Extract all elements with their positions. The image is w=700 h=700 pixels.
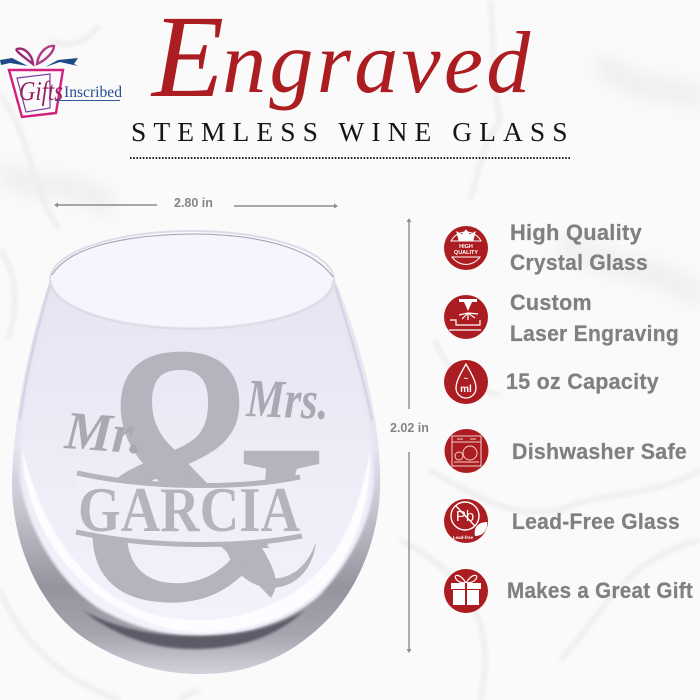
engraved ampersand swash [225, 542, 316, 588]
label line 2: Crystal Glass [510, 250, 648, 275]
label: 15 oz Capacity [506, 369, 659, 394]
icon: crown badge: HIGH [459, 244, 473, 250]
icon: gift [451, 575, 481, 605]
icon: gift bow [0, 46, 78, 67]
icon: lead free: Lead-free [453, 535, 474, 540]
icon: drop ml [456, 364, 476, 398]
icon: gift box [9, 70, 63, 117]
glass side edges [20, 285, 372, 420]
feature: 15 oz Capacity [444, 360, 659, 404]
logo wordmark Inscribed: Inscribed [64, 84, 122, 101]
feature: Custom Laser Engraving [444, 290, 679, 346]
engraved ampersand: & [82, 271, 333, 677]
icon: drop ml: ml [460, 384, 472, 395]
logo: Gifts Inscribed [0, 46, 122, 117]
subtitle: Stemless Wine Glass: STEMLESS WINE GLASS [131, 116, 575, 147]
engraved Mrs.: Mrs. [245, 368, 330, 431]
icon: crown badge: QUALITY [454, 250, 478, 256]
feature: Dishwasher Safe [444, 429, 687, 473]
label: High Quality [510, 220, 642, 245]
label line 2: Laser Engraving [510, 321, 679, 346]
label: Lead-Free Glass [512, 509, 680, 534]
logo wordmark Gifts: Gifts [19, 76, 63, 106]
dimension: width 2.80 in [54, 196, 338, 210]
glass rim [50, 231, 334, 329]
feature: High Quality Crystal Glass [444, 220, 648, 275]
engraved Mr.: Mr. [62, 400, 145, 465]
engraved name GARCIA: GARCIA [78, 474, 300, 545]
icon: lead free: Pb [456, 508, 474, 525]
icon: drop ml: ~ [464, 374, 469, 383]
glass opening [52, 233, 332, 327]
icon: laser engraver [449, 299, 481, 330]
label: Makes a Great Gift [507, 578, 693, 603]
label: Dishwasher Safe [512, 439, 687, 464]
stemless wine glass photo [12, 231, 380, 677]
icon: crown badge [451, 230, 481, 264]
glass body [12, 280, 380, 674]
glass dark base [82, 610, 305, 649]
engraved band [76, 474, 302, 544]
glass white inner band [22, 450, 370, 632]
title: Engraved: ngraved [222, 15, 534, 112]
feature: Lead-Free Glass [444, 499, 680, 543]
dimension: width 2.80 in: 2.80 in [174, 196, 213, 210]
icon: lead free [451, 502, 487, 540]
glass inner cavity [20, 300, 374, 636]
feature: Makes a Great Gift [444, 569, 693, 613]
label: Custom [510, 290, 592, 315]
dimension: height 2.02 in: 2.02 in [390, 421, 429, 435]
dimension: height 2.02 in [390, 218, 429, 653]
icon: dishwasher [452, 436, 481, 466]
